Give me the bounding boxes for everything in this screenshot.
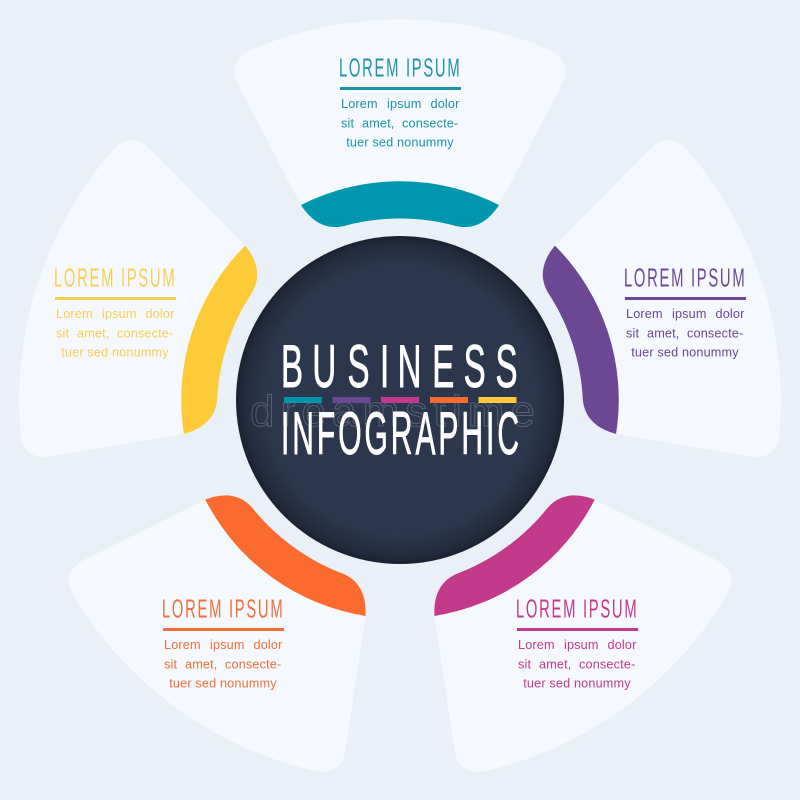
- segment: bottom-right magenta: [381, 460, 758, 800]
- panel: top wedge: [234, 19, 566, 205]
- accent arc: orange: [191, 482, 378, 635]
- text block: right: dolor: [716, 307, 745, 321]
- text block: bottom-right: sit: [518, 658, 531, 672]
- text block: right: LOREM IPSUM: [624, 264, 745, 293]
- segment: top teal: [234, 19, 566, 227]
- text block: bottom-left: Lorem: [164, 638, 201, 652]
- panel: bottom-right wedge: [381, 460, 758, 800]
- text block: left: [54, 264, 176, 360]
- text block: bottom-right: ipsum: [564, 638, 599, 652]
- text block: bottom-right: consecte-: [579, 658, 635, 672]
- text block: bottom-right: tuer sed nonummy: [523, 676, 631, 690]
- text block: bottom-left: [162, 595, 284, 690]
- panel: right wedge: [534, 125, 800, 497]
- central hub: [236, 236, 564, 564]
- text block: left: LOREM IPSUM: [54, 264, 175, 293]
- text block: bottom-left: amet,: [185, 658, 217, 672]
- text block: bottom-left: tuer sed nonummy: [169, 676, 277, 690]
- text block: right: consecte-: [687, 326, 743, 340]
- title: INFOGRAPHIC: INFOGRAPHIC: [281, 401, 519, 468]
- accent arc: yellow: [161, 238, 266, 441]
- text block: right: tuer sed nonummy: [631, 346, 739, 360]
- text block: top: LOREM IPSUM: [339, 54, 460, 83]
- panel: bottom-left wedge: [42, 460, 419, 800]
- hub circle: [236, 236, 564, 564]
- text block: left: consecte-: [117, 326, 173, 340]
- panel: left wedge: [0, 125, 266, 497]
- text block: right: sit: [626, 326, 639, 340]
- text block: bottom-right: dolor: [608, 638, 637, 652]
- text block: top: ipsum: [387, 97, 422, 111]
- text block: right: ipsum: [672, 307, 707, 321]
- text block: left: sit: [56, 326, 69, 340]
- segment: bottom-left orange: [42, 460, 419, 800]
- text block: left: amet,: [77, 326, 109, 340]
- text block: bottom-left: LOREM IPSUM: [162, 595, 283, 624]
- text block: top: tuer sed nonummy: [346, 136, 454, 150]
- accent arc: teal: [301, 181, 499, 227]
- text block: top: Lorem: [341, 97, 378, 111]
- colour bars: [284, 397, 516, 403]
- text block: bottom-left: ipsum: [210, 638, 245, 652]
- text block: right: amet,: [647, 326, 679, 340]
- text block: left: tuer sed nonummy: [61, 346, 169, 360]
- text block: left: ipsum: [102, 307, 137, 321]
- text block: top: consecte-: [402, 116, 458, 130]
- text block: right: [624, 264, 746, 360]
- text block: top: amet,: [362, 116, 394, 130]
- text block: top: dolor: [430, 97, 460, 111]
- text block: bottom-right: Lorem: [518, 638, 555, 652]
- text block: bottom-left: dolor: [254, 638, 283, 652]
- text block: bottom-right: amet,: [539, 658, 571, 672]
- text block: bottom-left: sit: [164, 658, 177, 672]
- text block: right: Lorem: [626, 307, 663, 321]
- accent arc: magenta: [422, 482, 609, 635]
- segment: left yellow: [0, 125, 266, 497]
- text block: bottom-left: consecte-: [225, 658, 281, 672]
- title: BUSINESS: BUSINESS: [281, 334, 518, 401]
- text block: left: Lorem: [56, 307, 93, 321]
- text block: left: dolor: [146, 307, 175, 321]
- segment: right purple: [534, 125, 800, 497]
- text block: bottom-right: LOREM IPSUM: [516, 595, 637, 624]
- text block: bottom-right: [516, 595, 638, 690]
- watermark: dreamstime: [250, 387, 535, 436]
- accent arc: purple: [534, 238, 639, 441]
- text block: top: sit: [341, 116, 354, 130]
- text block: top: [339, 54, 461, 149]
